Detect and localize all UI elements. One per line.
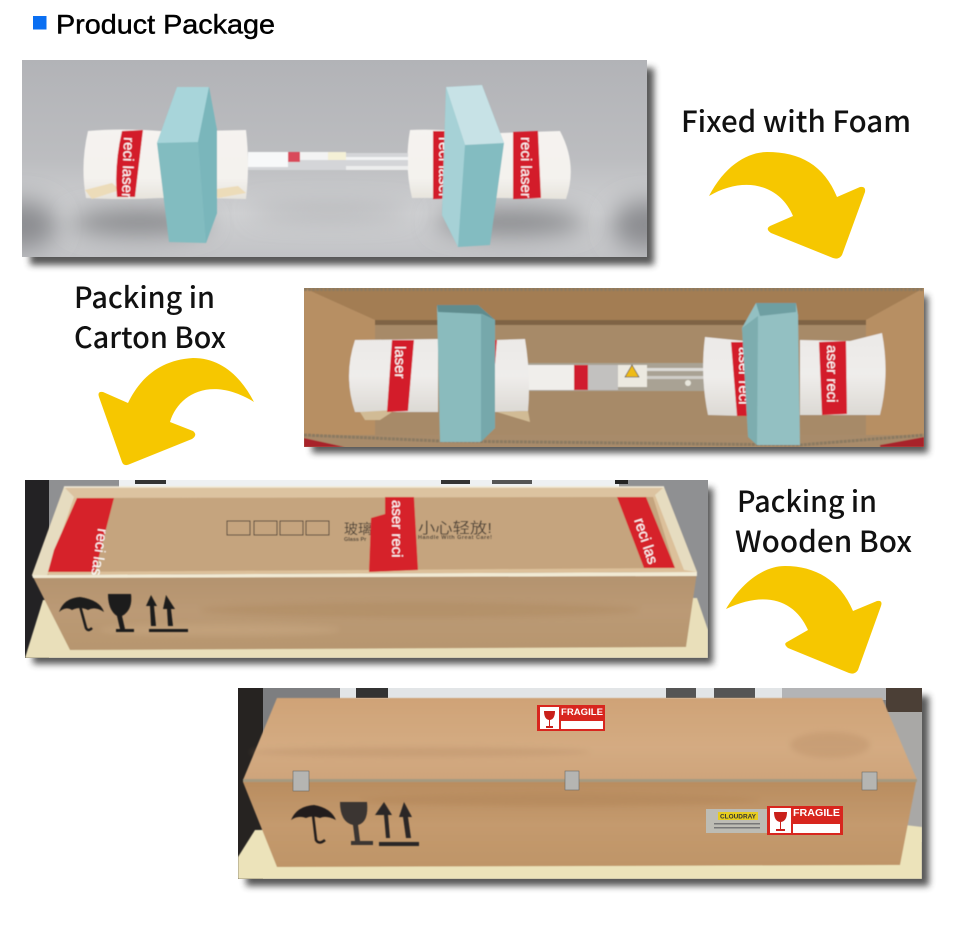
carton printed text: 玻璃: [344, 521, 372, 537]
arrow: curved yellow arrow to wooden box photo: [98, 358, 254, 465]
right foam roll: [407, 130, 571, 199]
carton front edge: [304, 438, 924, 447]
stencil: this-way-up arrows: [375, 802, 419, 846]
box lid: [243, 698, 917, 780]
photo: closed wooden box: [238, 688, 929, 886]
photo: tube packed in carton box: aser reci: [735, 347, 752, 405]
fragile label on front: [767, 806, 843, 835]
photo: carton in open wooden box: [25, 480, 713, 664]
glass tube and label: [527, 363, 707, 391]
photo: carton in open wooden box: 小心轻放!: [418, 520, 492, 537]
photo: laser tube fixed with foam: reci laser: [435, 137, 452, 198]
left foam roll: [83, 130, 248, 199]
glass tube: [248, 153, 408, 170]
photo: tube packed in carton box: [304, 288, 928, 453]
cardboard lid: [50, 497, 675, 572]
caption: Fixed with Foam: Fixed with Foam: [681, 99, 911, 141]
caption: Packing in Carton Box: Packing in: [74, 275, 215, 317]
red tapes in carton: [387, 340, 414, 412]
stencil: wine glass: [108, 594, 134, 632]
foam roll left: [349, 339, 438, 412]
arrow: curved yellow arrow to carton photo: [709, 152, 865, 259]
left foam block in carton: [437, 305, 495, 442]
caption: Packing in Wooden Box: Wooden Box: [735, 519, 912, 561]
photo: carton in open wooden box: Glass Pr: [344, 537, 367, 543]
photo: carton in open wooden box: aser reci: [388, 500, 405, 558]
box front: [243, 782, 916, 867]
icon: blue square bullet: [33, 16, 46, 30]
arrow: curved yellow arrow to closed box photo: [726, 566, 882, 674]
photo: carton in open wooden box: Handle With Great Care!: [418, 535, 492, 541]
pale wood base: [238, 825, 922, 879]
stencil: wine glass: [340, 802, 373, 845]
heading: Product Package: [33, 10, 275, 40]
right foam block in carton: [742, 303, 800, 445]
tape printing on carton: reci las: [87, 527, 111, 577]
left foam block: [156, 141, 206, 244]
fragile label on lid: FRAGILE: [561, 707, 603, 718]
carton floor: [376, 336, 866, 416]
box inner walls: [32, 487, 697, 575]
photo: carton in open wooden box: reci las: [630, 516, 661, 566]
tape printing: reci laser: [118, 137, 137, 198]
photo: laser tube fixed with foam: reci laser: [517, 137, 534, 198]
stencil: this-way-up arrows: [146, 595, 188, 632]
fragile label on front: FRAGILE: [793, 807, 840, 819]
Cloudray nameplate: [706, 809, 767, 833]
icon row on carton: [227, 521, 329, 535]
fragile label on lid: [537, 705, 605, 731]
photo: laser tube fixed with foam: [0, 60, 682, 265]
pale wood base: [25, 598, 708, 658]
caption: Packing in Carton Box: Carton Box: [74, 315, 226, 357]
photo: tube packed in carton box: aser reci: [823, 345, 840, 403]
Cloudray nameplate: CLOUDRAY: [720, 814, 757, 820]
right foam block: [442, 132, 504, 248]
heading text: Product Package: [56, 10, 275, 40]
stencil: umbrella: [291, 805, 336, 842]
tape printing in carton: laser: [391, 346, 408, 379]
caption: Packing in Wooden Box: Packing in: [737, 479, 877, 521]
stencil: umbrella: [59, 597, 104, 630]
red tapes on carton: [48, 498, 114, 572]
red tapes on rolls: [116, 130, 143, 197]
carton walls: [304, 288, 924, 320]
foam roll right: [703, 337, 745, 416]
wooden box front: [32, 572, 697, 650]
hinges: [293, 771, 877, 791]
